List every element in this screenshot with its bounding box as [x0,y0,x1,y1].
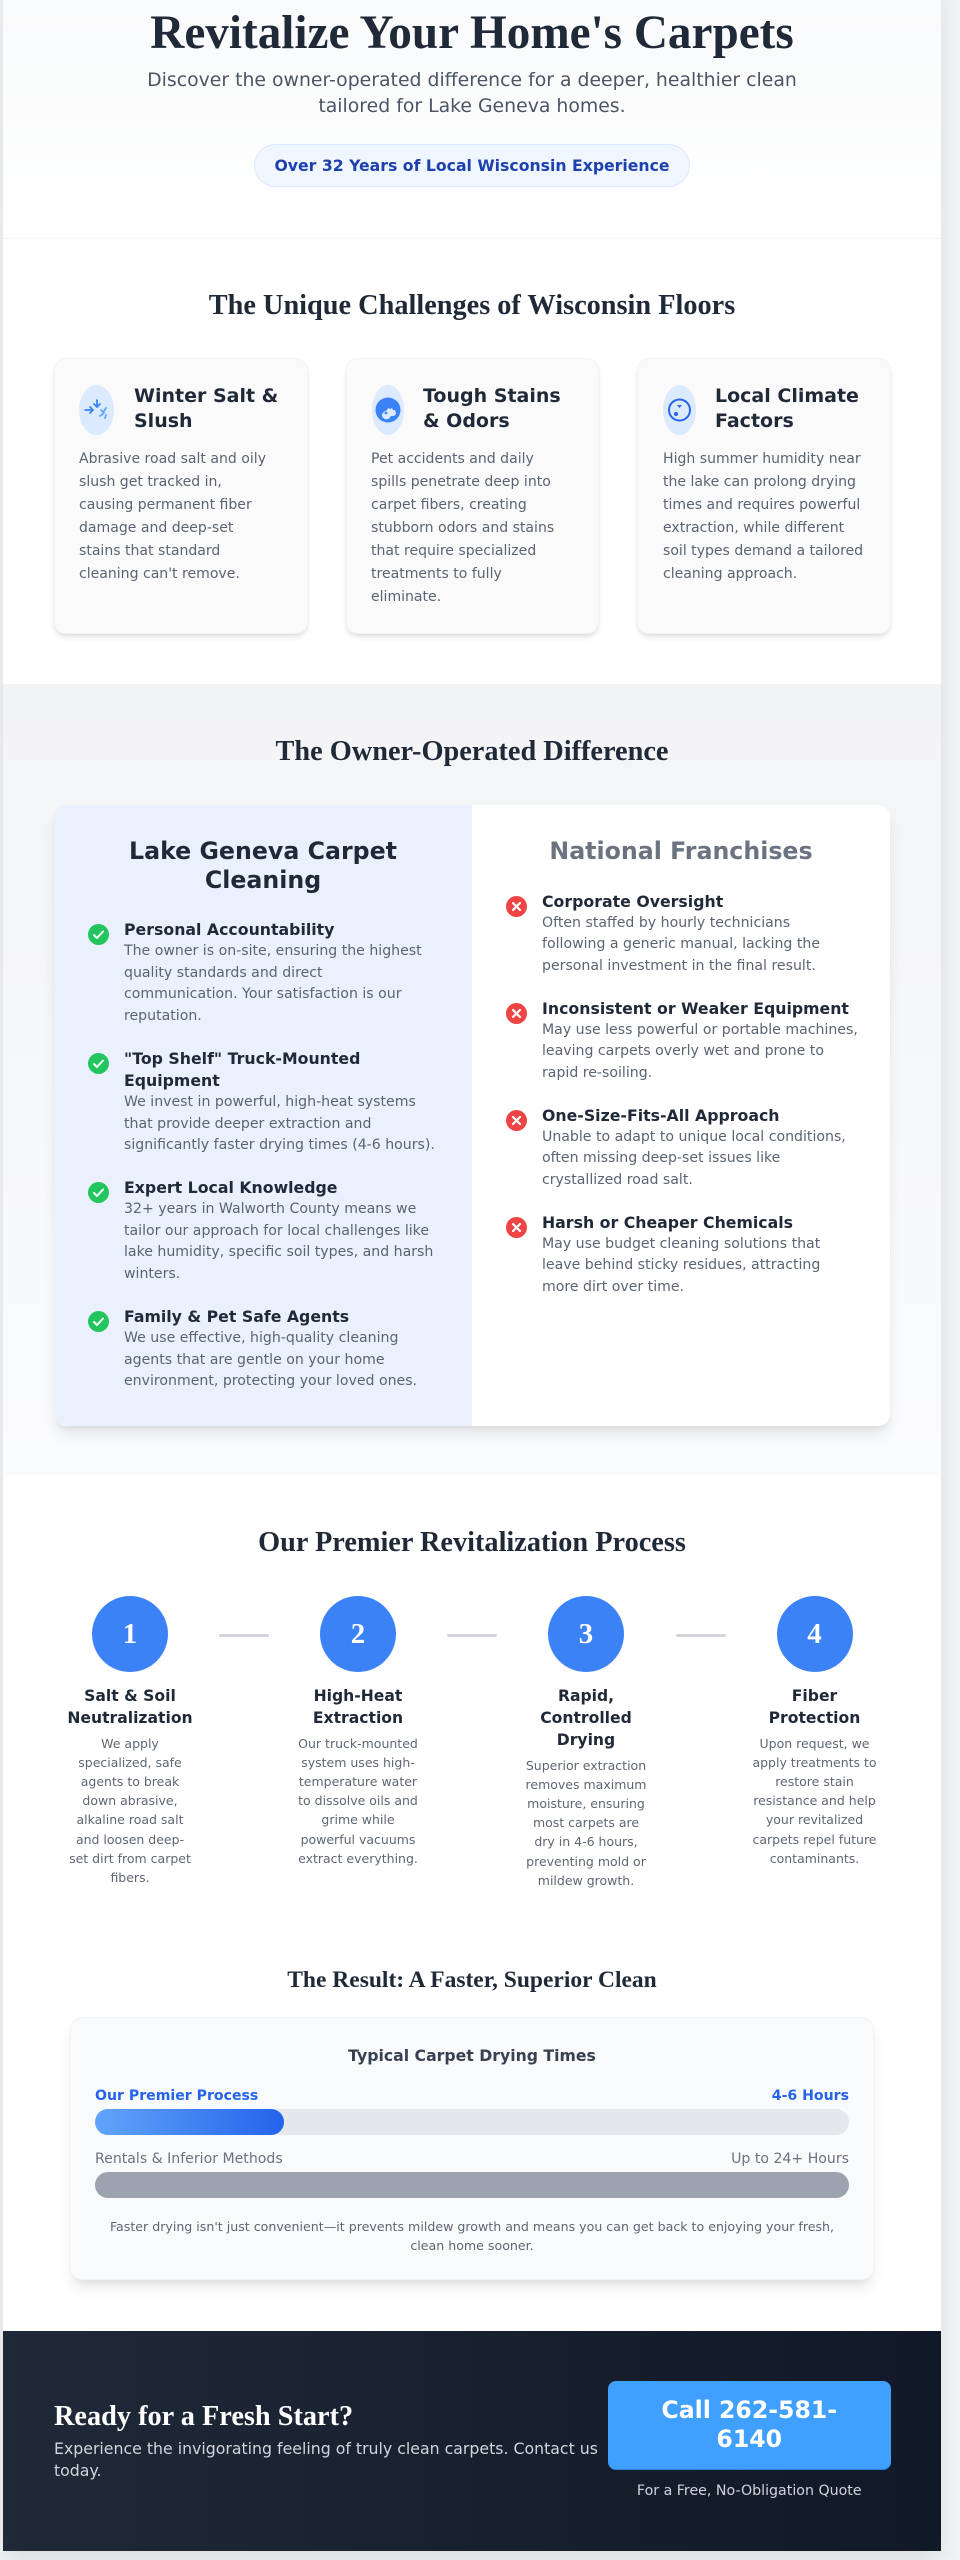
CTA text [54,2438,598,2482]
bar track [95,2109,849,2135]
item text: Personal Accountability [124,920,334,939]
card title: Local Climate [715,385,859,407]
item text [542,998,858,1081]
card text: Abrasive road salt and oily [79,451,266,467]
step text: Salt & Soil [84,1686,176,1704]
list item [506,1106,846,1188]
icon: salt crystals [79,385,114,435]
column heading: National Franchises [549,837,813,865]
experience badge [254,144,690,187]
card text: times and requires powerful [663,497,860,513]
item text: personal investment in the final result. [542,958,816,974]
list item [88,920,422,1024]
panel: National Franchises column [472,805,890,1426]
item text: One-Size-Fits-All Approach [542,1106,780,1124]
value: 4-6 Hours [772,2088,849,2104]
item text: that provide deeper extraction and [124,1116,371,1132]
step text [734,1684,894,1868]
step text: most carpets are [533,1815,639,1830]
step text: Fiber [792,1686,837,1704]
icon: stain [372,385,404,435]
column heading: Cleaning [205,866,321,894]
heading: result: The Result: A Faster, Superior Clean [287,1967,657,1993]
subtitle: tailored for Lake Geneva homes. [318,96,626,116]
step text: Protection [769,1708,860,1726]
panel: winter salt card [54,358,308,634]
chart note: clean home sooner. [410,2238,534,2253]
header [3,0,941,239]
step text: dry in 4-6 hours, [534,1834,638,1849]
card title: Tough Stains [423,385,561,407]
subtitle: Discover the owner-operated difference for a deeper, healthier clean [147,70,797,91]
call button: 6140 [716,2425,782,2453]
section: comparison [3,684,941,1475]
item text: Inconsistent or Weaker Equipment [542,998,849,1018]
step text: and loosen deep- [76,1832,184,1847]
connector arrow [219,1634,269,1637]
CTA text: today. [54,2461,102,2480]
card text: slush get tracked in, [79,474,222,490]
card text: soil types demand a tailored [663,543,863,559]
card title: Factors [715,410,794,432]
number circle: 2 [351,1618,365,1650]
step text: set dirt from carpet [69,1851,191,1866]
item text: Expert Local Knowledge [124,1178,337,1197]
item text: following a generic manual, lacking the [542,936,820,952]
item text: agents that are gentle on your home [124,1352,384,1368]
card text: that require specialized [371,543,536,559]
step text: High-Heat [314,1686,402,1704]
icon: cross [506,1217,527,1238]
item text: Often staffed by hourly technicians [542,914,790,930]
step text: contaminants. [770,1851,859,1866]
step text: Neutralization [67,1708,193,1726]
icon: climate [663,385,696,435]
call button [608,2381,891,2470]
item text: 32+ years in Walworth County means we [124,1201,416,1217]
step 3 [506,1596,666,1894]
item text: reputation. [124,1008,202,1024]
number circle [548,1596,624,1672]
button note: For a Free, No-Obligation Quote [637,2483,862,2499]
card text: causing permanent fiber [79,497,252,513]
heading: comparison: The Owner-Operated Difference [276,736,668,767]
step 4 [734,1596,894,1872]
list item [88,1307,417,1389]
card title [715,385,859,432]
heading: process: Our Premier Revitalization Process [258,1527,686,1558]
item text: We use effective, high-quality cleaning [124,1330,398,1346]
card text: eliminate. [371,589,441,605]
item text: winters. [124,1266,180,1282]
card text: High summer humidity near [663,451,861,467]
item text: more dirt over time. [542,1279,684,1295]
call button: Call 262-581- [661,2396,837,2424]
label: Our Premier Process [95,2088,258,2104]
item text: crystallized road salt. [542,1172,693,1188]
step text: mildew growth. [538,1873,634,1888]
step text [506,1684,666,1890]
CTA text: Experience the invigorating feeling of truly clean carpets. Contact us [54,2439,598,2458]
item text: often missing deep-set issues like [542,1150,780,1166]
step text: Superior extraction [526,1758,646,1772]
step text: resistance and help [753,1793,876,1808]
item text: Unable to adapt to unique local conditions, [542,1128,846,1144]
step text: We apply [101,1736,159,1750]
step text: apply treatments to [752,1755,877,1770]
item text: Harsh or Cheaper Chemicals [542,1212,793,1232]
card text [663,451,863,582]
step text: Rapid, [558,1686,614,1704]
card text [371,451,554,605]
step text: to dissolve oils and [298,1793,418,1808]
item text: leaving carpets overly wet and prone to [542,1043,824,1059]
card text: stubborn odors and stains [371,520,554,536]
bar fill [95,2109,284,2135]
step text: Upon request, we [759,1736,870,1750]
item text [124,920,422,1024]
step text: preventing mold or [526,1854,646,1869]
list item [506,998,858,1081]
step text: temperature water [299,1774,417,1789]
card text [79,451,266,582]
card title: Slush [134,410,193,432]
item text: environment, protecting your loved ones. [124,1373,417,1389]
step text: fibers. [110,1870,150,1885]
list item [506,892,820,974]
card text: cleaning can't remove. [79,566,240,582]
card text: stains that standard [79,543,220,559]
icon: cross [506,896,527,917]
column heading [129,837,397,894]
step text: specialized, safe [78,1755,182,1770]
card text: treatments to fully [371,566,502,582]
card title [134,385,278,432]
column heading: Lake Geneva Carpet [129,837,397,865]
item text: Corporate Oversight [542,892,723,910]
experience badge: Over 32 Years of Local Wisconsin Experience [274,156,670,175]
list item [88,1178,433,1282]
chart title: Typical Carpet Drying Times [348,2046,596,2064]
call to action band [3,2331,941,2551]
connector arrow [676,1634,726,1637]
card title: Winter Salt & [134,385,278,407]
value: Up to 24+ Hours [731,2151,849,2167]
item text [542,1212,820,1295]
item text [124,1178,433,1282]
item text [124,1307,417,1389]
step text: removes maximum [526,1777,646,1792]
number circle [776,1596,852,1672]
panel: comparison table [54,805,890,1426]
item text: We invest in powerful, high-heat systems [124,1094,416,1110]
step 2 [298,1596,418,1866]
chart note: Faster drying isn't just convenient—it prevents mildew growth and means you can get back to enjoying your fresh, [110,2219,834,2234]
subtitle [147,70,797,116]
step text: Extraction [313,1708,403,1726]
card text: the lake can prolong drying [663,474,856,490]
bar row: rentals [95,2149,849,2199]
item text: rapid re-soiling. [542,1065,652,1081]
item text: The owner is on-site, ensuring the highest [124,943,422,959]
step text: agents to break [81,1774,179,1789]
step text: alkaline road salt [76,1812,183,1827]
item text: May use budget cleaning solutions that [542,1236,820,1252]
icon: check [88,1053,109,1074]
card title [423,385,561,432]
card title: & Odors [423,410,510,432]
chart note [71,2217,873,2255]
card text: damage and deep-set [79,520,233,536]
bar [95,2172,849,2198]
icon: check [88,1182,109,1203]
item text: communication. Your satisfaction is our [124,986,402,1002]
icon: cross [506,1003,527,1024]
item text: quality standards and direct [124,965,323,981]
step text: your revitalized [766,1812,863,1827]
item text [124,1049,435,1153]
panel: Lake Geneva column [54,805,472,1426]
step text: extract everything. [298,1851,418,1866]
item text [542,892,820,974]
item text: Family & Pet Safe Agents [124,1307,349,1326]
number circle: 1 [123,1618,137,1650]
panel: drying times chart [70,2017,874,2280]
step text: system uses high- [301,1755,415,1770]
card text: carpet fibers, creating [371,497,527,513]
step text: Our truck-mounted [298,1736,418,1750]
step text: carpets repel future [752,1832,876,1847]
bar row: premier [95,2086,849,2136]
list item [506,1212,820,1295]
item text: "Top Shelf" Truck-Mounted [124,1049,360,1068]
card text: cleaning approach. [663,566,797,582]
item text: leave behind sticky residues, attracting [542,1257,820,1273]
number circle: 4 [807,1618,822,1650]
number circle [92,1596,168,1672]
label: Rentals & Inferior Methods [95,2151,283,2167]
heading: challenges: The Unique Challenges of Wisconsin Floors [209,290,735,321]
step text: powerful vacuums [301,1832,415,1847]
item text: May use less powerful or portable machines, [542,1022,858,1038]
step text: grime while [321,1812,395,1827]
step text: Drying [557,1730,615,1748]
connector arrow [447,1634,497,1637]
item text: Equipment [124,1071,220,1090]
title: Revitalize Your Home's Carpets [150,7,794,59]
list item [88,1049,435,1153]
card text: extraction, while different [663,520,844,536]
card text: Pet accidents and daily [371,451,534,467]
card text: spills penetrate deep into [371,474,551,490]
item text: tailor our approach for local challenges like [124,1223,429,1239]
panel: local climate card [637,358,891,634]
item text [542,1106,846,1188]
step text [298,1686,418,1866]
step 1 [67,1596,193,1885]
item text: significantly faster drying times (4-6 hours). [124,1137,435,1153]
panel: tough stains card [346,358,599,634]
number circle [320,1596,396,1672]
step text: Controlled [540,1708,632,1726]
step text: down abrasive, [82,1793,178,1808]
step text [67,1686,193,1885]
item text: lake humidity, specific soil types, and harsh [124,1244,433,1260]
icon: cross [506,1110,527,1131]
number circle: 3 [579,1618,593,1650]
step text: restore stain [775,1774,854,1789]
CTA heading: Ready for a Fresh Start? [54,2401,353,2432]
icon: check [88,1311,109,1332]
step text: moisture, ensuring [527,1796,645,1811]
icon: check [88,924,109,945]
